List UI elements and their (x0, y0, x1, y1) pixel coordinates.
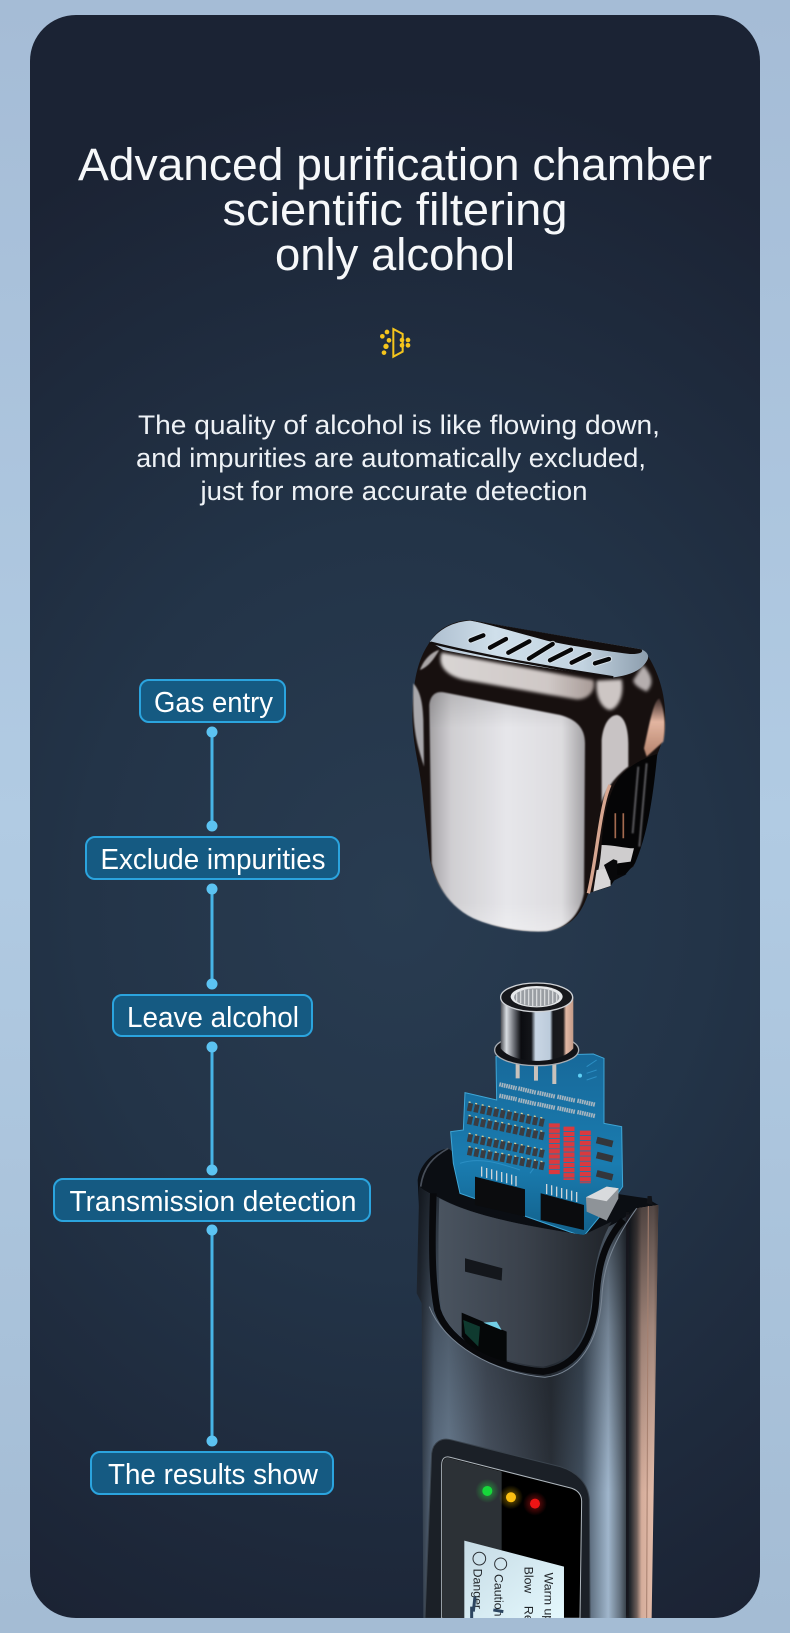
resistor rows (499, 1084, 595, 1116)
silver connector (586, 1187, 619, 1221)
step: Transmission detection: Transmission detection (70, 1186, 356, 1218)
chrome purification chamber cap (412, 620, 665, 932)
LCD labels: Caution (491, 1574, 505, 1617)
LCD labels (471, 1568, 553, 1618)
breath analyzer device (417, 983, 658, 1622)
LCD screen (464, 1541, 564, 1618)
IC chips (475, 1177, 525, 1217)
upper highlight strip (440, 653, 594, 699)
step: Exclude impurities: Exclude impurities (100, 844, 326, 876)
step: Gas entry: Gas entry (154, 687, 273, 719)
metal sensor can (495, 983, 579, 1066)
title: Advanced purification chamber (78, 139, 712, 190)
copper side strip (647, 1206, 648, 1618)
small chip rows (468, 1107, 546, 1167)
red components (554, 1123, 585, 1183)
LCD labels: Re (521, 1606, 535, 1622)
recess inner part (462, 1313, 507, 1362)
U-shaped recess (438, 1198, 612, 1367)
pen front housing (417, 1187, 658, 1622)
description text (136, 410, 660, 506)
display glass (442, 1457, 582, 1618)
step: The results show (91, 1452, 333, 1494)
step: Gas entry (140, 680, 285, 722)
icon: filter door with particles (380, 329, 410, 357)
LCD labels: Danger (470, 1569, 484, 1609)
recess slot (465, 1258, 502, 1281)
description text: and impurities are automatically excluded, (136, 443, 646, 473)
circuit board (451, 1054, 623, 1237)
back rim of housing (418, 1148, 658, 1234)
description text: The quality of alcohol is like flowing down, (138, 410, 660, 440)
side opening (593, 754, 657, 892)
main bright face (429, 692, 585, 932)
flow connector lines (206, 726, 218, 1446)
step: The results show: The results show (108, 1459, 319, 1491)
description text: just for more accurate detection (199, 476, 588, 506)
title (78, 139, 712, 280)
LED indicators (475, 1479, 547, 1516)
vent slots (471, 635, 609, 663)
LCD labels: Blow (521, 1567, 535, 1593)
sensor pins (518, 1060, 554, 1084)
step: Leave alcohol: Leave alcohol (127, 1002, 299, 1034)
top lid (430, 621, 648, 677)
LCD labels: Warm up (542, 1573, 556, 1622)
right side chips (597, 1140, 613, 1177)
title: only alcohol (275, 229, 515, 280)
display bezel (425, 1439, 590, 1618)
title: scientific filtering (222, 184, 568, 235)
